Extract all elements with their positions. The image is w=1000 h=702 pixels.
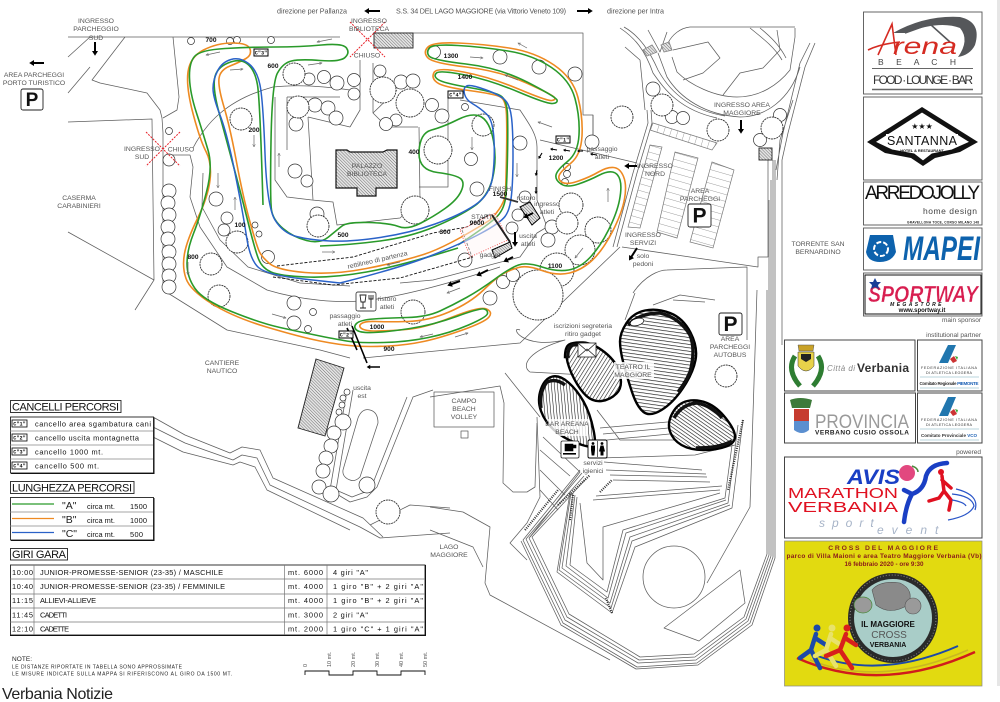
map place labels: atleti (338, 321, 353, 328)
icon: parking porto turistico: P (26, 90, 39, 111)
distance markers: 900 (383, 346, 395, 353)
header road labels: S.S. 34 DEL LAGO MAGGIORE (via Vittorio Veneto 109) (396, 6, 566, 16)
map place labels: est (357, 393, 367, 400)
legend: lunghezza percorsi: 1000 (130, 516, 147, 525)
legend: giri gara table: 1 giro "B" + 2 giri "A" (333, 596, 423, 605)
map place labels: FINISH (489, 186, 511, 193)
map place labels: SUD (89, 35, 103, 42)
legend: lunghezza percorsi: "C" (62, 528, 77, 540)
distance markers: 200 (248, 127, 260, 134)
legend: giri gara table: 2 giri "A" (333, 610, 368, 620)
sponsor: Arena Beach: rena (893, 33, 957, 59)
map place labels: INGRESSO (351, 18, 387, 25)
event logo: Avis Marathon Verbania: AVIS (846, 466, 900, 489)
legend: giri gara table: mt. 3000 (288, 610, 323, 620)
partner: Città di Verbania: Verbania (857, 361, 909, 375)
map place labels: LAGO (440, 544, 458, 551)
legend: giri gara table: mt. 4000 (288, 582, 323, 591)
legend: giri gara table: 1 giro "C" + 1 giri "A" (333, 624, 423, 634)
thick black direction arrows (31, 11, 741, 367)
event poster: Cross del Maggiore: CROSS (871, 630, 907, 641)
legend: cancelli percorsi: cancello 1000 mt. (35, 448, 103, 456)
gate markers: C"2" (340, 332, 352, 338)
icon: coffee cup (561, 441, 579, 458)
map place labels: BEACH (452, 406, 476, 413)
distance markers: 1000 (370, 324, 385, 331)
icon: parking porto turistico (21, 89, 43, 111)
palazzo biblioteca building (336, 150, 397, 196)
map place labels: atleti (595, 154, 610, 161)
map place labels: uscita (519, 233, 537, 240)
legend: lunghezza percorsi: circa mt. (87, 530, 115, 539)
partner: Provincia VCO: VERBANO CUSIO OSSOLA (815, 430, 909, 436)
route A green (187, 44, 621, 343)
partner: Provincia VCO (784, 393, 916, 443)
scale bar: 40 mt. (399, 651, 405, 667)
legend: giri gara table: 4 giri "A" (333, 568, 368, 577)
distance markers: 300 (439, 229, 451, 236)
legend: giri gara table: ALLIEVI-ALLIEVE (40, 596, 96, 605)
legend: giri gara table: 11:45 (12, 610, 33, 620)
map place labels: VOLLEY (451, 414, 478, 421)
dashed start straight lines (273, 214, 490, 285)
sponsor: Arredojolly (864, 182, 982, 225)
legend: lunghezza percorsi: circa mt. (87, 502, 115, 511)
legend: cancelli percorsi: C"1" (13, 422, 26, 428)
partner: FIDAL Piemonte: Comitato Regionale PIEMONTE (920, 381, 978, 386)
sponsor: Mapei (864, 228, 982, 270)
map place labels: NORD (645, 171, 665, 178)
partner: FIDAL Piemonte: DI ATLETICA LEGGERA (926, 371, 973, 375)
scale bar: 0 (303, 664, 309, 667)
sponsor: Arena Beach: B E A C H (878, 57, 956, 67)
partner: FIDAL Piemonte: FEDERAZIONE ITALIANA (921, 366, 978, 370)
map place labels: iscrizioni segreteria (554, 323, 612, 330)
sponsor: Sportway (864, 273, 982, 316)
parking stalls (628, 123, 734, 248)
map place labels: PALAZZO (352, 163, 382, 170)
map place labels: MAGGIORE (614, 372, 652, 379)
legend: lunghezza percorsi: circa mt. (87, 516, 115, 525)
event poster: Cross del Maggiore: 16 febbraio 2020 - ore 9:30 (844, 561, 924, 568)
icon: ristoro fork and glass (356, 292, 376, 311)
legend: giri gara table: JUNIOR-PROMESSE-SENIOR (23-35) / MASCHILE (40, 568, 223, 577)
hatched buildings and structures (298, 33, 772, 436)
route B orange (184, 43, 626, 346)
legend: giri gara table: mt. 2000 (288, 624, 323, 634)
map place labels: CHIUSO (168, 146, 194, 154)
sponsor: Santanna: HOTEL & RESTAURANT (900, 149, 944, 153)
event logo: Avis Marathon Verbania (784, 457, 982, 538)
map place labels: CANTIERE (205, 360, 240, 367)
note text: NOTE: (12, 656, 32, 663)
icon: toilets (588, 440, 607, 458)
sponsor: Santanna (864, 97, 982, 180)
map place labels: passaggio (586, 146, 618, 153)
header road labels: direzione per Intra (607, 6, 664, 16)
legend: lunghezza percorsi: "A" (62, 500, 77, 512)
map place labels: igienici (583, 468, 604, 475)
legend: giri gara table: CADETTI (40, 610, 67, 620)
icon: parking area nord (688, 204, 711, 228)
map place labels: BAR AREANA (545, 421, 589, 428)
map place labels: ritiro gadget (565, 331, 601, 338)
legend: lunghezza percorsi: LUNGHEZZA PERCORSI (12, 482, 132, 494)
legend: lunghezza percorsi: "B" (62, 514, 77, 526)
distance markers: 9000 (470, 220, 485, 227)
sponsor: Sportway: www.sportway.it (898, 308, 945, 314)
legend: cancelli percorsi: cancello 500 mt. (35, 462, 99, 470)
map place labels: MAGGIORE (430, 552, 468, 559)
map place labels: INGRESSO (637, 163, 673, 170)
event poster: Cross del Maggiore: CROSS DEL MAGGIORE (828, 545, 940, 552)
map place labels: AREA PARCHEGGI (4, 72, 64, 79)
legend: giri gara table (10, 548, 426, 636)
map place labels: BEACH (555, 429, 579, 436)
distance markers: 1300 (444, 53, 459, 60)
legend: giri gara table: mt. 4000 (288, 596, 323, 605)
gate markers: C"3" (255, 50, 267, 56)
map place labels: TEATRO IL (616, 364, 651, 371)
map place labels: AREA (721, 336, 740, 343)
sponsor: Santanna: ★★★ (911, 122, 933, 131)
stepped stairs bands (525, 420, 743, 613)
map place labels: BIBLIOTECA (349, 26, 389, 33)
map place labels: AREA (691, 188, 710, 195)
header road labels (277, 6, 664, 16)
caption: main sponsor: main sponsor (942, 317, 982, 324)
event poster: Cross del Maggiore: IL MAGGIORE (861, 620, 915, 629)
event logo: Avis Marathon Verbania: VERBANIA (788, 500, 898, 516)
map place labels: PARCHEGGI (710, 344, 750, 351)
theatre shells (539, 310, 735, 450)
gate markers (254, 49, 570, 338)
distance markers (187, 37, 564, 353)
distance markers: 1400 (458, 74, 473, 81)
map place labels: INGRESSO (625, 232, 661, 239)
legend: cancelli percorsi: C"4" (13, 464, 26, 470)
map place labels: ristoro (517, 195, 536, 202)
legend: cancelli percorsi: cancello uscita montagnetta (35, 434, 140, 442)
map place labels: passaggio (330, 313, 361, 320)
event poster: Cross del Maggiore (784, 541, 982, 686)
legend: giri gara table: JUNIOR-PROMESSE-SENIOR (23-35) / FEMMINILE (40, 582, 225, 591)
event logo: Avis Marathon Verbania: sport (819, 516, 881, 530)
caption: powered: powered (956, 449, 981, 456)
distance markers: 1100 (548, 263, 562, 270)
map place labels: gadget (480, 252, 501, 259)
icon: parking autobus (719, 313, 742, 336)
legend: lunghezza percorsi (10, 482, 154, 540)
route C blue (213, 59, 513, 283)
legend: giri gara table: GIRI GARA (12, 549, 67, 561)
partner: FIDAL VCO: FEDERAZIONE ITALIANA (921, 418, 978, 422)
map place labels: INGRESSO (124, 146, 160, 153)
map place labels: SUD (135, 154, 149, 161)
sponsor: Sportway: SPORTWAY (868, 281, 980, 307)
legend: lunghezza percorsi: 500 (130, 530, 143, 539)
map place labels: PARCHEGGIO (73, 26, 119, 33)
scale bar (303, 651, 429, 675)
map place labels: pedoni (633, 261, 654, 268)
event logo: Avis Marathon Verbania: MARATHON (788, 486, 898, 502)
partner: FIDAL VCO (918, 393, 982, 443)
legend: giri gara table: 1 giro "B" + 2 giri "A" (333, 582, 423, 591)
gate markers: C"1" (557, 138, 569, 144)
thin direction arrows (188, 39, 608, 337)
scale bar: 50 mt. (423, 651, 429, 667)
map place labels: CASERMA (62, 195, 96, 202)
legend: lunghezza percorsi: 1500 (130, 502, 147, 511)
event poster: Cross del Maggiore: parco di Villa Maioni e area Teatro Maggiore Verbania (Vb) (786, 553, 982, 560)
partner: Provincia VCO: PROVINCIA (815, 412, 909, 433)
start and finish area (460, 197, 540, 258)
icon: envelope (578, 343, 596, 357)
note text: LE MISURE INDICATE SULLA MAPPA SI RIFERISCONO AL GIRO DA 1500 MT. (12, 672, 232, 678)
map place labels: servizi (583, 460, 603, 467)
map place labels: atleti (540, 209, 555, 216)
map place labels: PARCHEGGI (680, 196, 720, 203)
event logo: Avis Marathon Verbania: event (877, 523, 946, 537)
gate markers: C"4" (449, 92, 462, 98)
legend: giri gara table: 10:40 (12, 582, 33, 591)
note text (12, 656, 232, 678)
map place labels: MAGGIORE (723, 110, 761, 117)
map place labels: BIBLIOTECA (347, 171, 387, 178)
distance markers: 700 (205, 37, 217, 44)
map place labels: NAUTICO (207, 368, 237, 375)
scale bar: 20 mt. (351, 651, 357, 667)
partner: Città di Verbania: Città di (827, 364, 855, 373)
closed entrance red crosses (146, 22, 385, 166)
map place labels: INGRESSO (78, 18, 114, 25)
map place labels: rettilineo di partenza (347, 250, 408, 271)
scale bar: 10 mt. (327, 651, 333, 667)
map place labels: PORTO TURISTICO (3, 80, 65, 87)
map place labels: INGRESSO AREA (714, 102, 770, 109)
icon: parking autobus: P (723, 313, 738, 336)
distance markers: 500 (337, 232, 349, 239)
distance markers: 600 (267, 63, 279, 70)
distance markers: 800 (187, 254, 199, 261)
map place labels: AUTOBUS (714, 352, 747, 359)
small black arrows near atleti entrance (536, 149, 597, 193)
legend: cancelli percorsi: CANCELLI PERCORSI (12, 402, 119, 414)
right edge strip (997, 0, 1000, 686)
sponsor: Arredojolly: ARREDOJOLLY (865, 183, 980, 204)
map place labels: ingresso (534, 201, 560, 208)
header road labels: direzione per Pallanza (277, 6, 347, 16)
legend: cancelli percorsi: C"2" (13, 436, 26, 442)
legend: cancelli percorsi: C"3" (13, 450, 26, 456)
map place labels: solo (637, 253, 649, 260)
map place labels: atleti (380, 304, 395, 311)
map place labels: CAMPO (452, 398, 476, 405)
legend: cancelli percorsi (10, 400, 154, 474)
event poster: Cross del Maggiore: VERBANIA (870, 642, 906, 649)
note text: LE DISTANZE RIPORTATE IN TABELLA SONO APPROSSIMATE (12, 664, 183, 670)
partner: FIDAL VCO: DI ATLETICA LEGGERA (926, 423, 973, 427)
sponsor: Arredojolly: home design (923, 206, 977, 216)
base map: park, roads and theatre plan lines (68, 27, 815, 669)
distance markers: 100 (234, 222, 246, 229)
map place labels: BERNARDINO (795, 249, 841, 256)
partner: FIDAL VCO: Comitato Provinciale VCO (921, 433, 977, 438)
scale bar: 30 mt. (375, 651, 381, 667)
map place labels: SERVIZI (630, 240, 656, 247)
map place labels: ristoro (378, 296, 397, 303)
large trees (200, 63, 783, 524)
legend: giri gara table: 12:10 (12, 624, 33, 634)
legend: giri gara table: 10:00 (12, 568, 33, 577)
map place labels: TORRENTE SAN (791, 241, 845, 248)
legend: giri gara table: mt. 6000 (288, 568, 323, 577)
partner: Città di Verbania (784, 340, 915, 391)
icon: parking area nord: P (692, 204, 707, 228)
map place labels: CHIUSO (354, 52, 380, 60)
sponsor: Arredojolly: GRAVELLONA TOCE, CORSO MILANO 148 (907, 220, 979, 224)
partner: FIDAL Piemonte (918, 340, 982, 391)
map place labels: atleti (521, 241, 536, 248)
map place labels: CARABINIERI (57, 203, 101, 210)
sponsor: Santanna: SANTANNA (887, 134, 958, 148)
legend: giri gara table: 11:15 (12, 596, 33, 605)
legend: giri gara table: CADETTE (40, 624, 69, 634)
map place labels (3, 18, 845, 559)
distance markers: 1500 (493, 191, 508, 198)
sponsor: Arena Beach: FOOD · LOUNGE · BAR (873, 73, 973, 87)
sponsor: Arena Beach (864, 12, 982, 94)
trees (161, 36, 786, 502)
map place labels: uscita (353, 385, 371, 392)
caption: institutional partner: institutional partner (926, 332, 982, 339)
legend: cancelli percorsi: cancello area sgambatura cani (35, 420, 151, 428)
distance markers: 1200 (549, 155, 564, 162)
map place labels: START (471, 214, 493, 221)
sponsor: Sportway: MEGASTORE (890, 302, 944, 308)
distance markers: 400 (408, 149, 420, 156)
